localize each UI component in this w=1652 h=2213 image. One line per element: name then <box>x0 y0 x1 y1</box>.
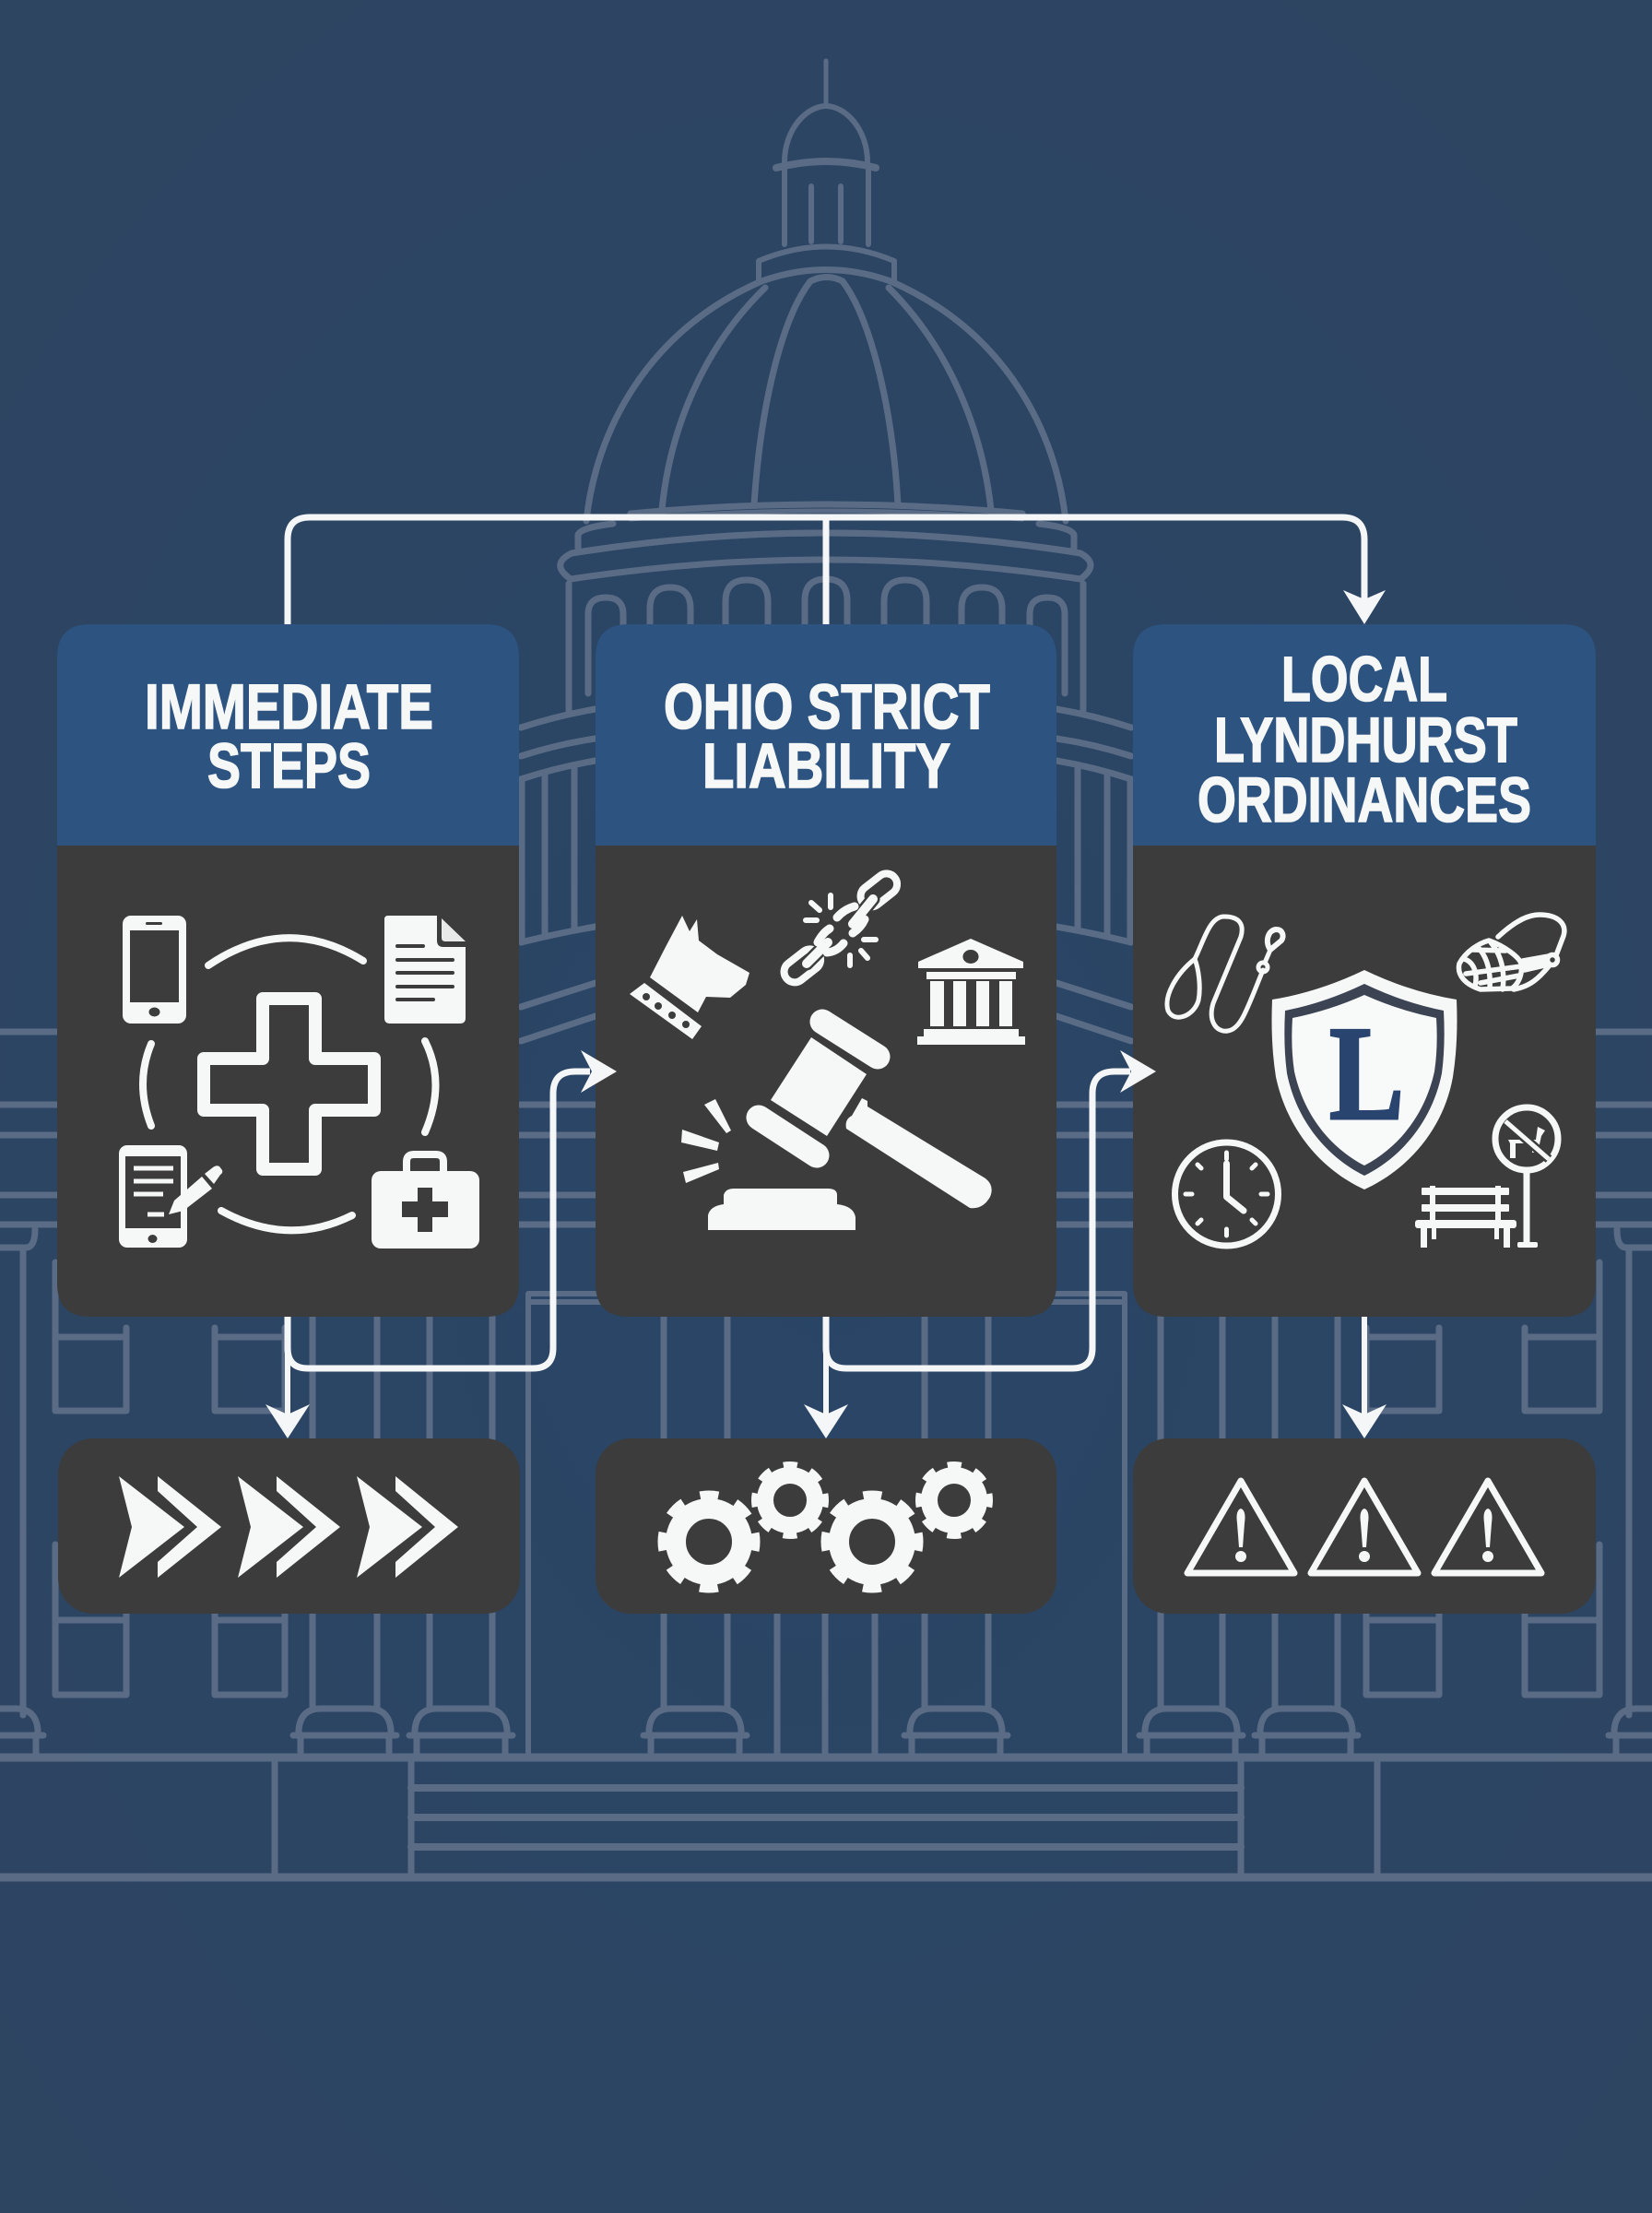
panel: gears box <box>596 1438 1056 1614</box>
panel header: local lyndhurst ordinances <box>1133 624 1596 846</box>
icon: broken chain <box>780 870 902 987</box>
panel: immediate steps <box>57 624 519 1317</box>
arrow: top connector to three cards <box>288 517 1386 624</box>
panel body: ohio strict liability <box>596 846 1056 1317</box>
icon: clock <box>1174 1142 1278 1246</box>
arrow: immediate steps to ohio strict liability <box>288 1050 617 1368</box>
icon: warning triangles <box>1187 1481 1541 1573</box>
icon: document <box>384 916 466 1024</box>
panel: chevrons box <box>58 1438 520 1614</box>
icon: tablet with pencil <box>119 1145 227 1248</box>
icon: dog head with collar <box>630 916 749 1039</box>
heading: ohio strict liability: LIABILITY <box>702 730 950 801</box>
arrow: local ordinances down <box>1342 1317 1386 1438</box>
panel: local lyndhurst ordinances <box>1133 624 1596 1317</box>
icon: bench <box>1415 1186 1516 1248</box>
arrow: ohio strict liability down <box>804 1317 848 1438</box>
icon: shield with L <box>1272 970 1457 1189</box>
shield letter: L <box>1329 999 1404 1148</box>
icon: medical cross outline <box>204 999 374 1169</box>
icon: no dogs sign <box>1495 1107 1558 1248</box>
arrow: ohio strict liability to local ordinances <box>826 1050 1156 1368</box>
icon: smartphone <box>123 916 186 1024</box>
heading: local lyndhurst ordinances: ORDINANCES <box>1198 764 1531 835</box>
panel: ohio strict liability <box>596 624 1056 1317</box>
icon: chevrons <box>119 1476 458 1578</box>
panel header: ohio strict liability <box>596 624 1056 846</box>
arrow: immediate steps down <box>266 1317 310 1438</box>
heading: immediate steps: IMMEDIATE <box>145 671 433 742</box>
icon: gavel <box>681 1022 992 1230</box>
heading: ohio strict liability: OHIO STRICT <box>664 671 990 742</box>
panel body: immediate steps <box>57 846 519 1317</box>
panel body: local lyndhurst ordinances <box>1133 846 1596 1317</box>
icon: cycle arcs <box>143 938 435 1230</box>
heading: local lyndhurst ordinances: LYNDHURST <box>1214 704 1517 775</box>
heading: local lyndhurst ordinances: LOCAL <box>1281 644 1447 715</box>
icon: gears <box>664 1466 988 1587</box>
icon: leash <box>1167 917 1283 1031</box>
icon: muzzle <box>1458 915 1564 989</box>
icon: courthouse <box>917 939 1025 1045</box>
panel: warnings box <box>1133 1438 1596 1614</box>
icon: first aid kit <box>372 1154 479 1249</box>
panel header: immediate steps <box>57 624 519 846</box>
heading: immediate steps: STEPS <box>207 730 371 801</box>
